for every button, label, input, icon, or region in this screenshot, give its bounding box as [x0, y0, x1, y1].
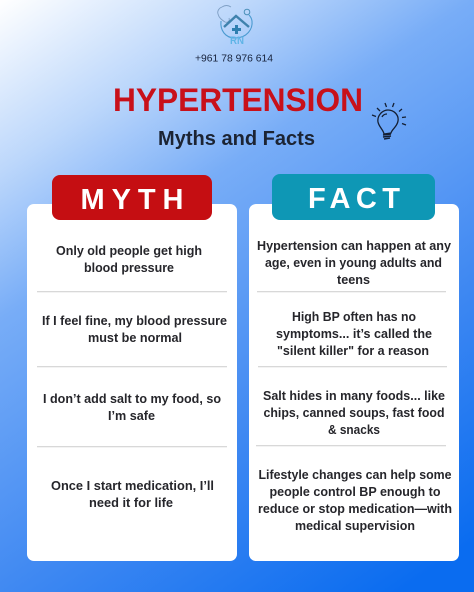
fact 1: age, even in young adults and: [265, 255, 442, 270]
fact 2: "silent killer" for a reason: [277, 343, 429, 358]
fact 1: Hypertension can happen at any: [257, 238, 452, 253]
fact 2: [276, 309, 432, 358]
fact 3: [263, 388, 445, 437]
myth 2: [42, 313, 227, 345]
fact 1: teens: [337, 272, 370, 287]
icon: RN home stethoscope logo: [218, 6, 252, 47]
icon: RN home stethoscope logo: RN: [230, 35, 244, 47]
myth 2: must be normal: [88, 330, 182, 345]
fact header badge: FACT: [308, 183, 400, 215]
myth header badge: MYTH: [80, 184, 184, 216]
fact 4: reduce or stop medication—with: [258, 501, 452, 516]
fact 2: High BP often has no: [292, 309, 416, 324]
fact 4: Lifestyle changes can help some: [258, 467, 452, 482]
myth card background: [27, 204, 237, 561]
myth 4: need it for life: [89, 495, 173, 510]
myth 4: Once I start medication, I’ll: [51, 478, 214, 493]
myth 2: If I feel fine, my blood pressure: [42, 313, 227, 328]
myth 1: Only old people get high: [56, 243, 202, 258]
myth 1: blood pressure: [84, 260, 174, 275]
panel: myth: [27, 175, 237, 561]
fact 3: & snacks: [328, 422, 380, 437]
fact header badge: [272, 174, 435, 220]
myth 3: I’m safe: [108, 408, 155, 423]
fact 1: [257, 238, 452, 287]
fact 2: symptoms... it’s called the: [276, 326, 432, 341]
fact card background: [249, 204, 459, 561]
icon: light bulb: [372, 103, 406, 139]
myth header badge: [52, 175, 212, 220]
myth 3: I don’t add salt to my food, so: [43, 391, 221, 406]
fact 3: chips, canned soups, fast food: [264, 405, 445, 420]
fact 4: people control BP enough to: [270, 484, 441, 499]
subtitle: Myths and Facts: [158, 128, 315, 150]
myth 1: [56, 243, 202, 275]
phone number: +961 78 976 614: [195, 52, 273, 64]
myth 3: [43, 391, 221, 423]
myth 4: [51, 478, 214, 510]
panel: fact: [249, 174, 459, 561]
fact 4: medical supervision: [295, 518, 415, 533]
fact 3: Salt hides in many foods... like: [263, 388, 445, 403]
title: HYPERTENSION: [113, 82, 363, 118]
fact 4: [258, 467, 452, 533]
